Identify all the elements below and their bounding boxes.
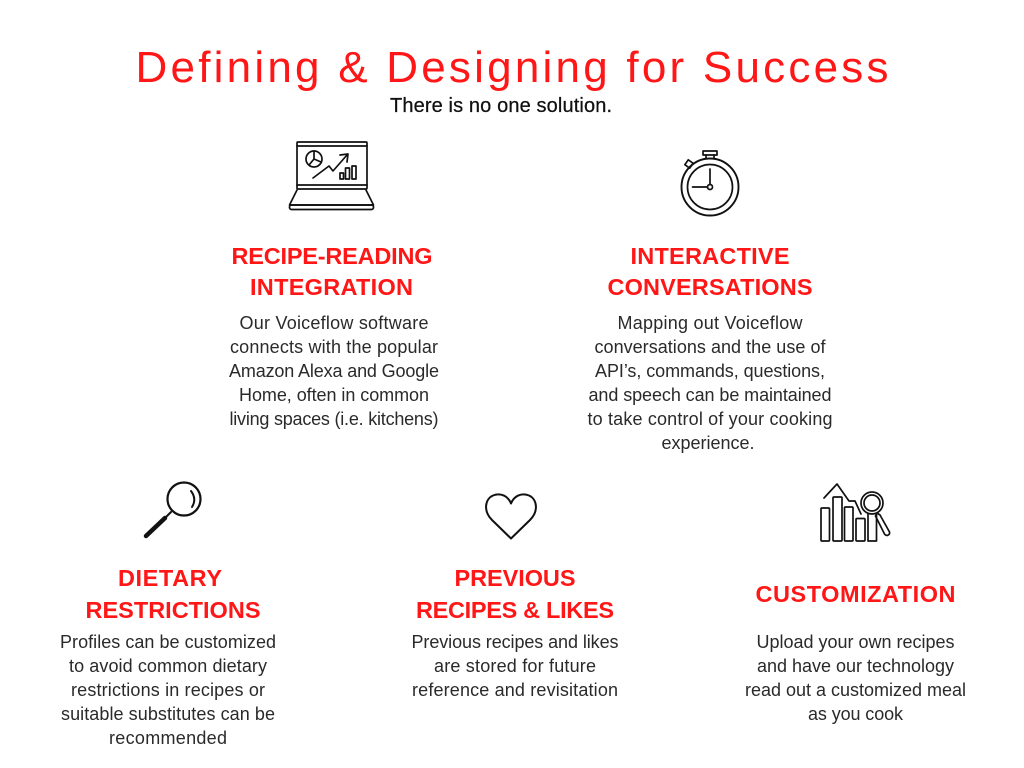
body text: Amazon Alexa and Google xyxy=(229,361,439,381)
body text: Our Voiceflow software xyxy=(240,313,428,333)
panel: interactive conversations xyxy=(588,151,832,453)
heading: CONVERSATIONS xyxy=(608,274,812,300)
body text: Upload your own recipes xyxy=(756,632,954,652)
body text: read out a customized meal xyxy=(745,680,966,700)
heading xyxy=(232,243,432,300)
body text: to avoid common dietary xyxy=(69,656,267,676)
heading: RECIPE-READING xyxy=(232,243,432,269)
heading: RECIPES & LIKES xyxy=(416,597,614,623)
body text: reference and revisitation xyxy=(412,680,618,700)
body text: and speech can be maintained xyxy=(588,385,832,405)
heading: DIETARY xyxy=(118,565,222,591)
body text xyxy=(588,313,832,453)
body text: Profiles can be customized xyxy=(60,632,276,652)
heading: INTERACTIVE xyxy=(630,243,790,269)
body text: and have our technology xyxy=(757,656,954,676)
body text: are stored for future xyxy=(434,656,596,676)
title: Defining & Designing for Success xyxy=(136,43,888,92)
body text: Home, often in common xyxy=(239,385,429,405)
heading: PREVIOUS xyxy=(454,565,576,591)
body text: Mapping out Voiceflow xyxy=(618,313,804,333)
heading: INTEGRATION xyxy=(250,274,413,300)
heading xyxy=(608,243,812,300)
heading xyxy=(416,565,614,623)
icon: heart xyxy=(486,494,536,538)
body text: as you cook xyxy=(808,704,904,724)
icon: magnifying glass xyxy=(146,482,200,536)
body text: connects with the popular xyxy=(230,337,438,357)
body text: Previous recipes and likes xyxy=(412,632,618,652)
body text xyxy=(412,632,618,700)
icon: laptop with charts xyxy=(290,142,374,210)
panel: customization xyxy=(745,484,966,724)
subtitle: There is no one solution. xyxy=(390,95,612,117)
body text: restrictions in recipes or xyxy=(71,680,265,700)
panel: recipe-reading integration xyxy=(229,142,439,429)
body text: to take control of your cooking xyxy=(588,409,832,429)
body text xyxy=(229,313,439,429)
body text: recommended xyxy=(109,728,227,748)
panel: previous recipes and likes xyxy=(412,494,618,700)
body text: conversations and the use of xyxy=(594,337,826,357)
body text: suitable substitutes can be xyxy=(61,704,275,724)
icon: bar chart with magnifier xyxy=(821,484,890,541)
body text: living spaces (i.e. kitchens) xyxy=(230,409,438,429)
body text xyxy=(745,632,966,724)
heading: CUSTOMIZATION xyxy=(756,581,956,607)
panel: dietary restrictions xyxy=(60,482,276,748)
body text xyxy=(60,632,276,748)
body text: experience. xyxy=(662,433,754,453)
body text: API’s, commands, questions, xyxy=(595,361,825,381)
heading xyxy=(86,565,260,623)
icon: stopwatch xyxy=(682,151,738,216)
heading: RESTRICTIONS xyxy=(86,597,260,623)
